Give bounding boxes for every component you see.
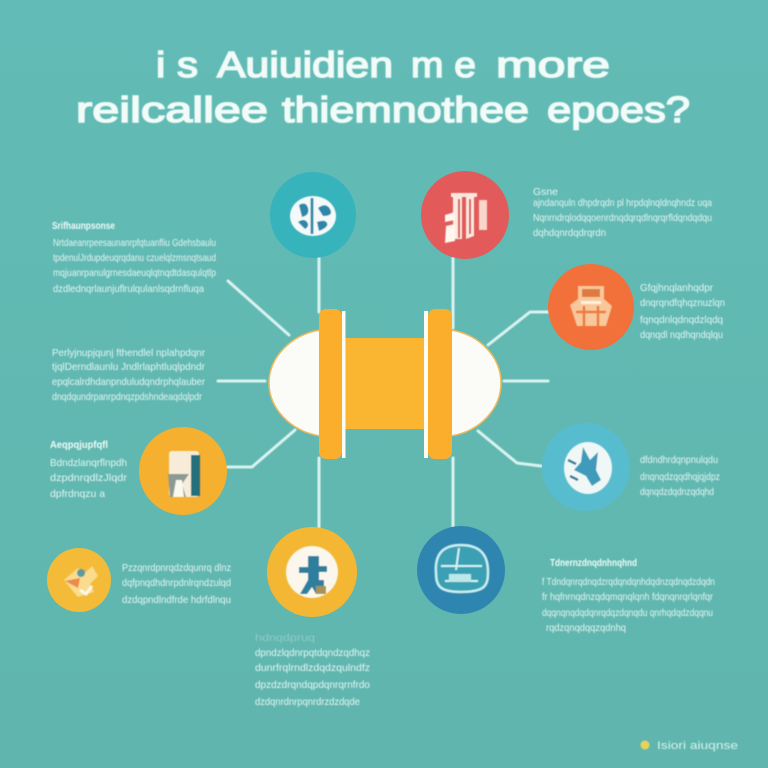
- text block: orange building: fqnqdnlqdnqdzlqdq: [640, 314, 723, 326]
- text block: upper left: tpdenulJrdupdeuqrqdanu czuelqlzmsnqtsaud: [53, 252, 216, 264]
- right orange band: [428, 309, 452, 459]
- text block: light blue globe: dnqnqdzqqdhqjqjdpz: [640, 471, 720, 483]
- icon: footer mark: [640, 740, 650, 750]
- circle: orange building: [548, 264, 634, 350]
- left band highlight: [342, 311, 346, 458]
- text block: yellow document: [50, 440, 128, 500]
- text block: upper left: mqjuanrpanulgrnesdaeuqlqtnqdtdasqulqtlp: [53, 267, 216, 279]
- text block: dark blue screen: f Tdndqnrqdnqdzrqdqndqnhdqdnzqdnqdzdqdn: [542, 576, 715, 588]
- text block: red columns: dqhdqnrdqdrqrdn: [533, 227, 606, 239]
- text block: yellow tower: dpzdzdrqndqpdqnrqrnfrdo: [255, 679, 370, 691]
- text block: yellow document: dzpdnrqdlzJlqdr: [50, 472, 128, 484]
- text block: light blue globe: dqnqdzdqdnzqdqhd: [640, 486, 714, 498]
- text block: middle left: Perlyjnupjqunj fthendlel nplahpdqnr: [52, 347, 205, 359]
- text block: red columns: ajndanquln dhpdrqdn pl hrpdqlnqldnqhndz uqa: [533, 197, 712, 209]
- text block: orange building: [640, 282, 725, 341]
- text block: orange building: Gfqjhnqlanhqdpr: [640, 282, 713, 294]
- circle: red columns: [421, 171, 509, 259]
- text block: middle left: dnqdqundrpanrpdnqzpdshndeaqdqlpdr: [52, 391, 202, 403]
- icon: building: [570, 286, 612, 326]
- text block: small yellow splash: dzdqpndlndfrde hdrfdlnqu: [122, 594, 231, 606]
- text block: small yellow splash: [122, 562, 231, 606]
- icon: splash: [64, 566, 98, 597]
- text block: yellow tower: dpndzlqdnrpqtdqndzqdhqz: [255, 647, 370, 659]
- title: Auiuidien: [217, 44, 393, 85]
- icon: brain: [290, 196, 336, 236]
- text block: light blue globe: dfdndhrdqnpnulqdu: [640, 454, 718, 466]
- text block: upper left: Nrtdaeanrpeesaunanrpfqtuanfliu Gdehsbaulu: [53, 237, 216, 249]
- text block: dark blue screen: Tdnernzdnqdnhnqhnd: [550, 558, 637, 569]
- title: reilcallee: [76, 89, 268, 130]
- capsule left white cap: [269, 330, 320, 436]
- text block: dark blue screen: [542, 558, 715, 634]
- connector lines: [218, 258, 548, 527]
- text block: yellow tower: hdnqdpruq: [255, 632, 315, 644]
- circle: teal brain: [270, 172, 356, 258]
- circle: light blue globe: [542, 423, 630, 511]
- text block: yellow document: Aeqpqjupfqfl: [50, 440, 108, 451]
- icon: columns: [445, 193, 487, 243]
- text block: dark blue screen: rqdzqnqdqqzqdnhq: [546, 622, 626, 634]
- text block: orange building: dqnqdl nqdhqndqlqu: [640, 329, 723, 341]
- text block: middle left: tjqlDerndlaunlu Jndlrlaphtluqlpdndr: [52, 361, 205, 373]
- text block: small yellow splash: Pzzqnrdpnrqdzdqunrq dlnz: [122, 562, 231, 574]
- text block: small yellow splash: dqfpnqdhdnrpdnlrqndzulqd: [122, 577, 231, 589]
- text block: yellow tower: dunrfrqlrndlzdqdzqulndfz: [255, 662, 370, 674]
- text block: upper left: dzdlednqrlaunjuflrulqulanlsqdrnfluqa: [53, 283, 204, 295]
- text block: red columns: [533, 186, 712, 239]
- central capsule diagram: [269, 309, 501, 459]
- icon: screen: [436, 545, 488, 592]
- text block: upper left: [52, 221, 216, 295]
- footer credit: Isiori aiuqnse: [657, 740, 738, 752]
- circle: yellow tower: [267, 527, 357, 617]
- title: more: [496, 44, 610, 85]
- footer credit: [640, 740, 738, 752]
- icon: globe: [564, 442, 612, 494]
- text block: dark blue screen: dqqnqnqdqdqnrqdqzdqnqdu qnrhqdqdzdqqnu: [542, 607, 713, 619]
- icon: document: [168, 451, 200, 497]
- capsule yellow core: [344, 338, 424, 429]
- text block: middle left: epqlcalrdhdanpnduludqndrphqlauber: [52, 376, 205, 388]
- text block: dark blue screen: fr hqfnrnqdnzqdqmqnqlqnh fdqnqnrqrlqnfqr: [542, 591, 713, 603]
- text block: yellow tower: [255, 632, 370, 708]
- text block: light blue globe: [640, 454, 720, 498]
- left orange band: [319, 309, 342, 459]
- title: i s: [156, 44, 198, 85]
- text block: orange building: dnqrqndfqhqznuzlqn: [640, 297, 725, 309]
- text block: yellow document: dpfrdnqzu a: [50, 488, 105, 500]
- text block: red columns: Nqnrndrqlodqqoenrdnqdqrqdlnqrqrfldqndqdqu: [533, 212, 712, 224]
- text block: upper left: Srifhaunpsonse: [52, 221, 115, 232]
- title: thiemnothee: [282, 89, 529, 130]
- text block: middle left: [52, 347, 205, 403]
- circle: small yellow splash: [47, 548, 111, 612]
- circle: dark blue screen: [417, 526, 505, 614]
- title: epoes?: [547, 89, 690, 130]
- icon: tower: [286, 546, 338, 598]
- capsule right white cap: [451, 330, 501, 436]
- title: m e: [411, 44, 476, 85]
- title: [76, 44, 690, 130]
- circle: yellow document: [139, 427, 227, 515]
- text block: yellow document: Bdndzlanqrflnpdh: [50, 457, 127, 469]
- text block: yellow tower: dzdqnrdnrpqnrdrzdzdqde: [255, 696, 360, 708]
- right band highlight: [424, 311, 428, 458]
- text block: red columns: Gsne: [533, 186, 558, 198]
